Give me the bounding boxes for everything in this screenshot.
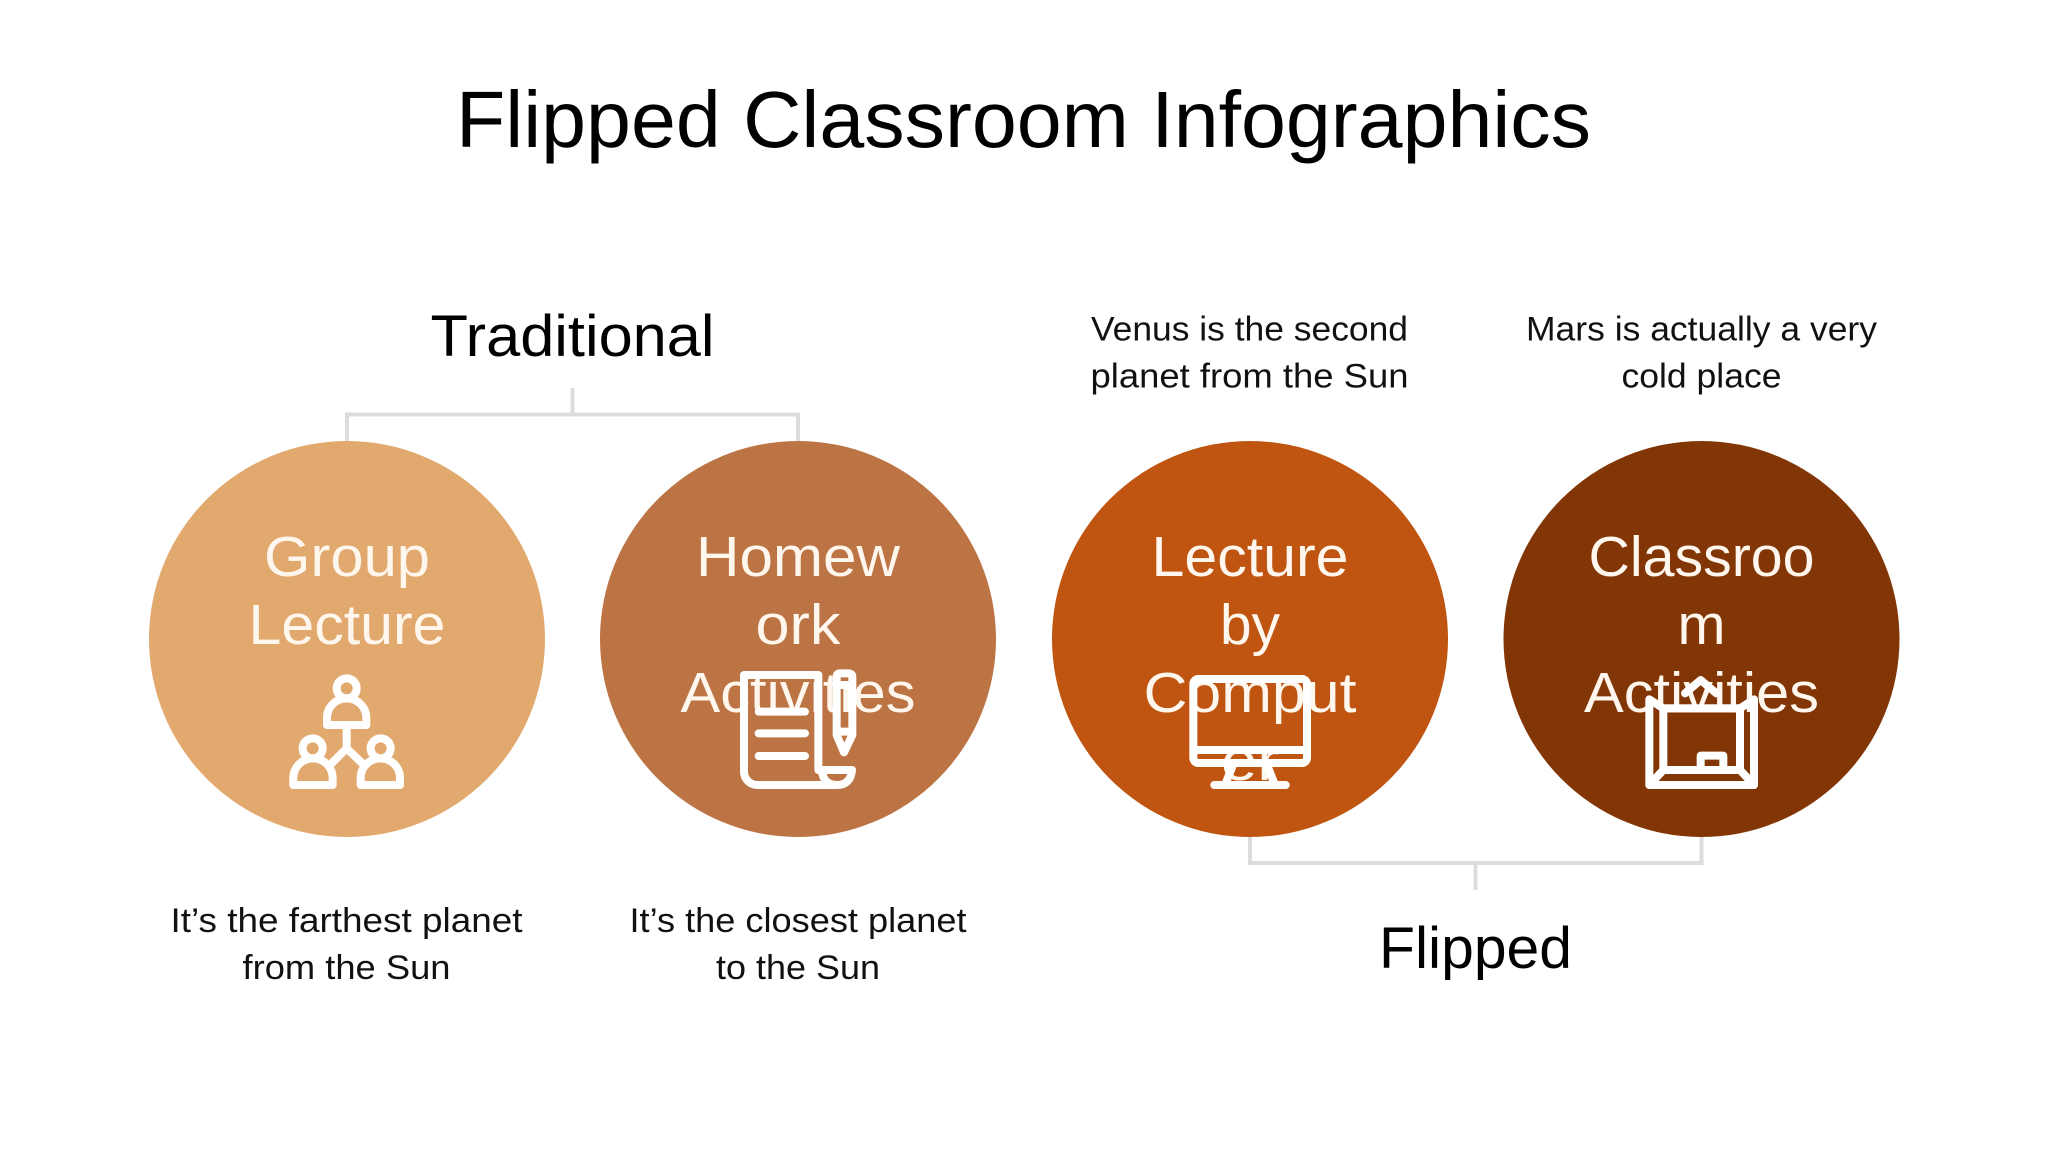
text block: closest planet description: to the Sun — [716, 949, 880, 987]
label: Group — [264, 525, 430, 589]
label: Activities — [680, 661, 916, 725]
label: Lecture — [248, 593, 446, 657]
heading: Flipped: Flipped — [1379, 916, 1572, 981]
text block: closest planet description — [630, 902, 967, 987]
text block: closest planet description: It’s the closest planet — [630, 902, 967, 940]
text block: Mars description: cold place — [1622, 358, 1782, 396]
label — [248, 525, 446, 657]
circle — [149, 441, 545, 837]
panel: Group Lecture — [149, 441, 545, 837]
label — [1144, 525, 1357, 793]
panel: Lecture by Computer — [1052, 441, 1448, 837]
panel: Classroom Activities — [1504, 441, 1900, 837]
label: ork — [756, 593, 841, 657]
label — [1584, 525, 1819, 725]
label: by — [1220, 593, 1280, 657]
label: m — [1678, 593, 1726, 657]
text block: Venus description: Venus is the second — [1091, 310, 1408, 348]
label: Comput — [1144, 661, 1357, 725]
bracket: Flipped connector — [1250, 837, 1702, 890]
text block: Venus description: planet from the Sun — [1090, 358, 1408, 396]
label: Classroo — [1588, 525, 1814, 589]
label: Activities — [1584, 661, 1819, 725]
label: Homew — [696, 525, 901, 589]
circle — [1052, 441, 1448, 837]
icon: people network — [293, 678, 400, 785]
circle — [1504, 441, 1900, 837]
label: Lecture — [1152, 525, 1348, 589]
title: Flipped Classroom Infographics — [456, 75, 1591, 164]
icon: classroom board box — [1649, 680, 1754, 785]
bracket: Traditional connector — [347, 388, 798, 441]
text block: farthest planet description: It’s the farthest planet — [170, 902, 523, 940]
panel: Homework Activities — [600, 441, 996, 837]
label: er — [1221, 729, 1279, 793]
text block: Venus description — [1090, 310, 1408, 396]
circle — [600, 441, 996, 837]
text block: Mars description — [1526, 310, 1877, 396]
heading: Traditional: Traditional — [430, 304, 714, 369]
label — [680, 525, 916, 725]
icon: scroll and pencil — [744, 673, 852, 785]
text block: farthest planet description: from the Sun — [242, 949, 450, 987]
icon: computer monitor — [1193, 679, 1307, 785]
text block: farthest planet description — [170, 902, 523, 987]
text block: Mars description: Mars is actually a very — [1526, 310, 1877, 348]
